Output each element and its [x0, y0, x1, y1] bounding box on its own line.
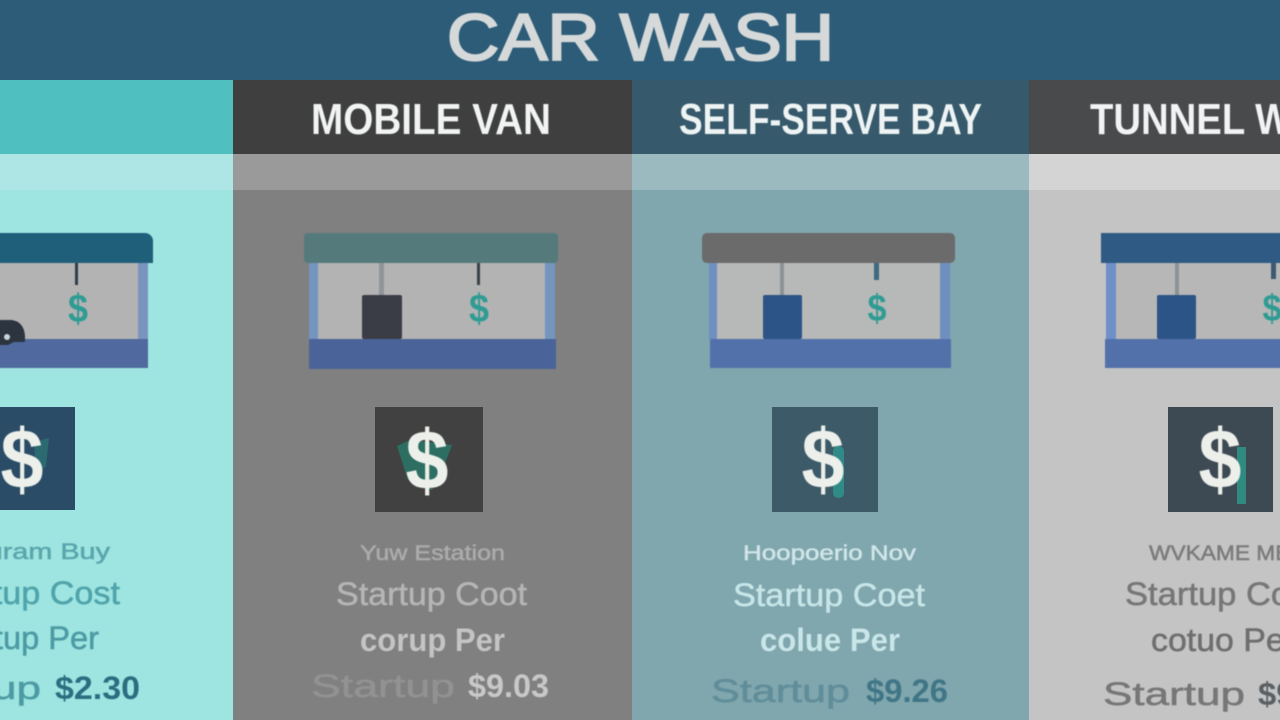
- mobile van body: [233, 190, 632, 720]
- tunnel wash body: [1029, 190, 1280, 720]
- mobile van labels: [311, 542, 549, 704]
- mobile van heading: MOBILE VAN: [311, 95, 551, 144]
- self-serve labels: [711, 542, 948, 709]
- illustration: wash bay one: [0, 233, 153, 368]
- icon: mobile van dollar tile: [375, 407, 483, 512]
- self-serve labels: colue Per: [760, 622, 900, 658]
- self-serve labels: Startup Coet: [733, 577, 925, 613]
- icon: tunnel wash dollar tile: [1168, 407, 1273, 512]
- tunnel wash labels: Startup: [1103, 676, 1245, 712]
- tunnel wash labels: [1103, 542, 1280, 712]
- icon: dollar tile one: $: [0, 412, 44, 506]
- illustration: wash bay one: $: [68, 287, 88, 331]
- mobile van labels: Yuw Estation: [360, 542, 505, 565]
- self-serve header: [632, 80, 1029, 154]
- title: CAR WASH: [447, 0, 834, 74]
- self-serve labels: Startup: [711, 673, 850, 709]
- column one labels: $2.30: [55, 670, 140, 706]
- self-serve heading: SELF-SERVE BAY: [679, 95, 982, 144]
- column one band: [0, 154, 233, 190]
- mobile van header: [233, 80, 632, 154]
- mobile van labels: Startup: [311, 668, 455, 704]
- panel: tunnel wash: [1029, 80, 1280, 720]
- illustration: self-serve bay: [702, 233, 955, 368]
- icon: mobile van dollar tile: $: [406, 413, 448, 507]
- column one body: [0, 190, 233, 720]
- icon: self-serve dollar tile: [772, 407, 878, 512]
- mobile van labels: $9.03: [468, 668, 549, 704]
- tunnel wash band: [1029, 154, 1280, 190]
- mobile van band: [233, 154, 632, 190]
- column one labels: [0, 539, 140, 706]
- illustration: mobile van bay: [304, 233, 558, 369]
- header band: [0, 0, 1280, 80]
- self-serve labels: $9.26: [866, 673, 948, 709]
- panel: car wash column one: [0, 80, 233, 720]
- icon: dollar tile one: [0, 407, 75, 510]
- illustration: mobile van bay: $: [469, 287, 489, 331]
- mobile van labels: Startup Coot: [336, 576, 527, 612]
- illustration: self-serve bay: $: [868, 288, 886, 330]
- self-serve labels: Hoopoerio Nov: [743, 542, 917, 565]
- mobile van labels: corup Per: [360, 622, 505, 658]
- icon: tunnel wash dollar tile: $: [1198, 412, 1242, 506]
- panel: self-serve bay: [632, 80, 1029, 720]
- self-serve band: [632, 154, 1029, 190]
- column one header: [0, 80, 233, 154]
- illustration: tunnel wash bay: [1101, 233, 1280, 368]
- panel: mobile van: [233, 80, 632, 720]
- tunnel wash header: [1029, 80, 1280, 154]
- self-serve body: [632, 190, 1029, 720]
- icon: self-serve dollar tile: $: [802, 412, 844, 506]
